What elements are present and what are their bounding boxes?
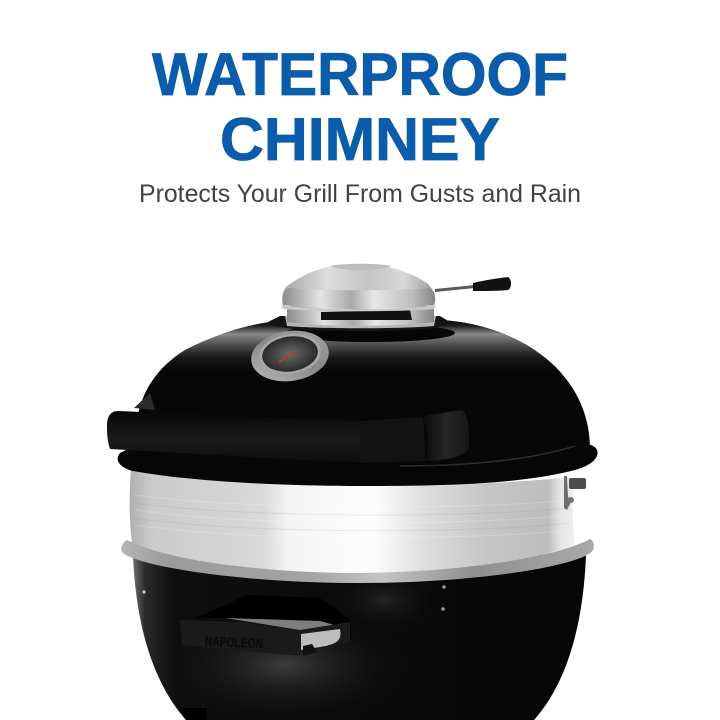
- stainless band: [130, 470, 574, 575]
- title: CHIMNEY: [220, 106, 500, 173]
- bowl handle with logo: [180, 595, 352, 656]
- title: [152, 41, 568, 173]
- damper handle: [435, 285, 475, 292]
- vent opening: [321, 310, 412, 320]
- latch: [564, 476, 586, 510]
- subtitle: Protects Your Grill From Gusts and Rain: [139, 180, 581, 208]
- lid dome: [130, 318, 600, 466]
- silver ring: [121, 539, 594, 583]
- bowl handle with logo: NAPOLEON: [205, 633, 263, 651]
- title: WATERPROOF: [152, 41, 568, 108]
- infographic canvas: [107, 52, 598, 720]
- kettle grill illustration: [107, 264, 600, 720]
- thermometer: [248, 326, 332, 386]
- lower bowl: [133, 555, 586, 720]
- chimney base plate: [268, 316, 450, 331]
- lid rim: [118, 443, 598, 486]
- lid handle: [107, 393, 469, 463]
- chimney collar: [287, 306, 434, 326]
- chimney: [268, 264, 511, 331]
- chimney cap: [282, 264, 435, 308]
